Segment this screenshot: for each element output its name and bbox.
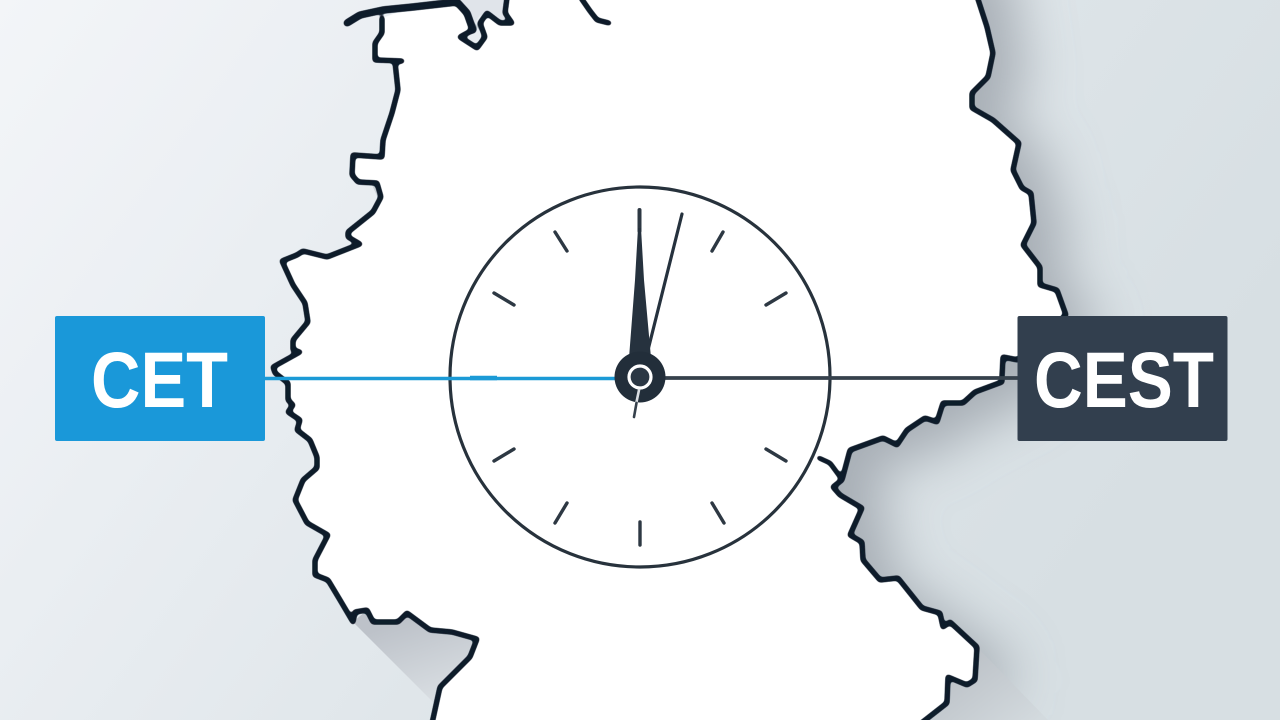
hour ticks xyxy=(494,232,786,545)
label: CEST xyxy=(1018,316,1228,441)
dark connector line xyxy=(664,376,1018,380)
hub ring xyxy=(629,366,651,388)
twelve o'clock tick xyxy=(638,210,642,231)
map of Germany xyxy=(273,0,1066,720)
label: CET: CET xyxy=(91,335,228,424)
clock hub xyxy=(614,352,666,402)
blue connector line xyxy=(265,376,616,380)
clock face xyxy=(450,187,830,567)
clock xyxy=(265,187,1018,567)
map border xyxy=(273,0,1066,720)
minute hand xyxy=(629,228,651,358)
hand tail xyxy=(634,390,639,417)
label: CEST: CEST xyxy=(1034,335,1214,424)
label: CET xyxy=(55,316,265,441)
second hand xyxy=(648,214,682,350)
map shadow xyxy=(353,0,1100,720)
map fill xyxy=(273,0,1066,720)
